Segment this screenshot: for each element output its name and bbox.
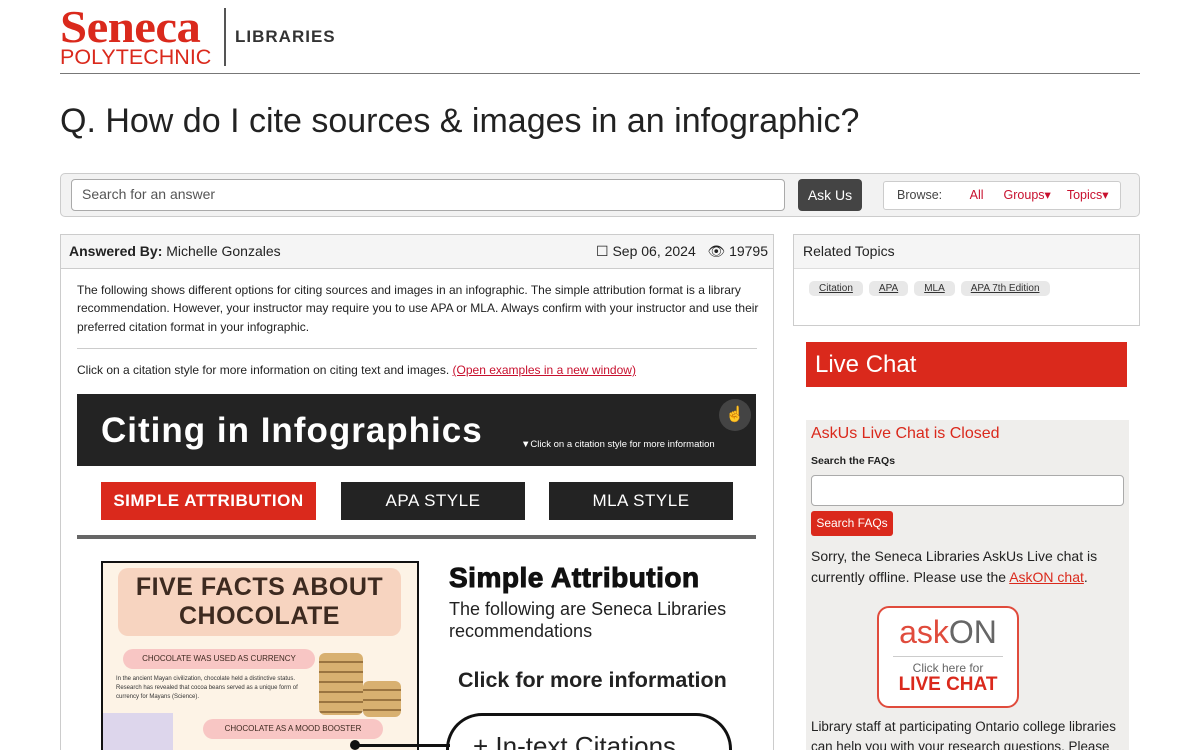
infographic header: Citing in Infographics [101,411,483,450]
chocolate image: FIVE FACTS ABOUT [136,573,383,601]
buttons [101,482,316,520]
live chat header [806,342,1127,387]
panel: answer: Answered By: Michelle Gonzales [69,243,281,259]
panel: answer: ☐ Sep 06, 2024 👁 19795 [596,243,768,259]
text: MLA STYLE [592,491,690,510]
chocolate image: CHOCOLATE WAS USED AS CURRENCY [142,654,296,663]
search bar: Ask Us [808,187,852,203]
panel: askus: Search FAQs [816,516,888,530]
infographic header: ▼Click on a citation style for more information [521,439,715,450]
panel: related topics: Related Topics [803,243,895,259]
title: Q. How do I cite sources & images in an infographic? [60,102,859,140]
chocolate image [101,561,419,750]
panel: answer: Click on a citation style for more information on citing text and images. (Open examples in a new window) [77,363,636,377]
infographic header [77,394,756,466]
text: Click for more information [458,668,727,692]
logo [60,1,336,69]
search bar: Browse: All Groups▾ Topics▾ [897,188,1109,202]
pill: in-text citations [446,713,732,750]
buttons: SIMPLE ATTRIBUTION [113,491,304,510]
panel: askus [806,420,1129,750]
logo: POLYTECHNIC [60,45,211,69]
panel: answer [60,234,774,750]
simple attribution text: Simple Attribution [449,562,700,593]
panel: askus: Library staff at participating Ontario college libraries [811,719,1116,734]
chocolate image: CHOCOLATE AS A MOOD BOOSTER [225,724,361,733]
search bar [60,173,1140,217]
simple attribution text: The following are Seneca Libraries recommendations [449,599,726,641]
panel: related topics: Citation APA MLA APA 7th Edition [819,283,1040,294]
panel: answer: The following shows different options for citing sources and images in an infographic. The simple attribution format is a library recommendation. However, your instructor may require you to use APA or MLA. Always confirm with your instructor and use their preferred citation format in your infographic. [77,283,758,334]
search bar: Search for an answer [82,186,215,202]
connector arrow [350,740,450,750]
chocolate image: CHOCOLATE [179,602,340,630]
infographic header: ☝ [726,406,744,423]
askON logo: askON [899,614,997,650]
simple attribution text [449,562,726,641]
logo: Seneca [60,1,200,52]
chocolate image: In the ancient Mayan civilization, chocolate held a distinctive status. Research has revealed that cocoa beans served as a unique form of currency for Mayans (Science). [116,676,298,700]
panel: askus: Search the FAQs [811,455,895,467]
logo: LIBRARIES [235,27,336,46]
text: APA STYLE [386,491,480,510]
askON logo: Click here for [913,661,983,675]
panel: askus: AskUs Live Chat is Closed [811,425,1000,442]
panel: related topics [793,234,1140,326]
askON logo [877,606,1019,708]
panel: askus: Sorry, the Seneca Libraries AskUs Live chat is currently offline. Please use the AskON chat. [811,548,1097,585]
askON logo: LIVE CHAT [899,674,997,695]
live chat header: Live Chat [815,351,916,378]
